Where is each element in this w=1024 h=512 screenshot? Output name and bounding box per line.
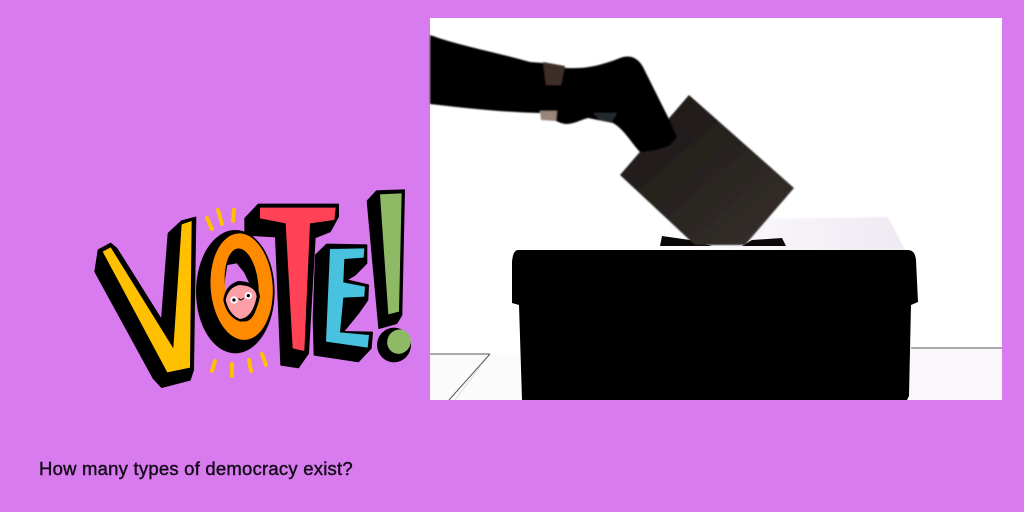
exclamation mark <box>367 190 415 362</box>
question text: How many types of democracy exist? <box>39 458 353 479</box>
illustration: VOTE! lettering <box>95 190 415 387</box>
floor <box>430 348 1002 400</box>
photo background <box>430 18 1002 400</box>
watch <box>543 62 565 85</box>
ballot box <box>512 250 918 400</box>
letter V <box>95 217 196 387</box>
ballot paper <box>620 95 794 245</box>
letter E <box>313 244 372 362</box>
slot edges <box>660 236 786 246</box>
character face <box>223 281 260 322</box>
arm and hand <box>430 35 677 152</box>
back of box <box>660 217 905 250</box>
letter T <box>245 204 338 368</box>
letter O <box>196 230 276 353</box>
sparkle lines <box>207 210 266 376</box>
photo: hand casting ballot into box <box>430 18 1002 400</box>
